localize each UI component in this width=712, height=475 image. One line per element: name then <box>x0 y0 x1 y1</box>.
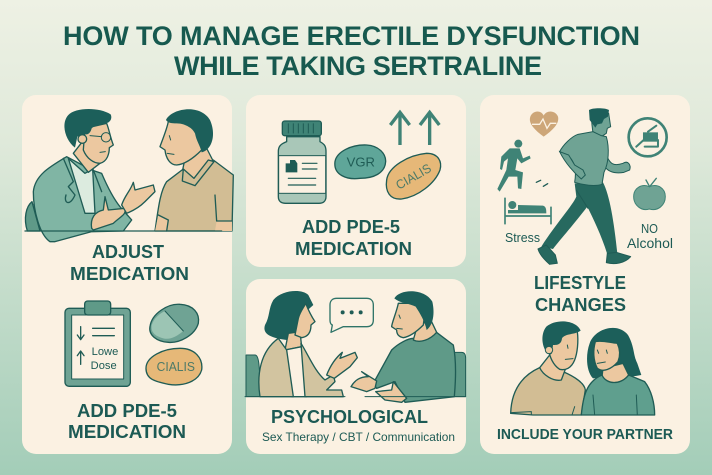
icon: no-alcohol circle <box>629 118 667 156</box>
heading: adjust medication: ADJUST <box>92 242 164 262</box>
title: WHILE TAKING SERTRALINE <box>174 51 542 81</box>
heading: adjust medication <box>70 242 189 284</box>
heading: add PDE-5 medication <box>295 217 412 259</box>
heading: lifestyle changes: LIFESTYLE <box>534 273 626 293</box>
illustration: doctor and patient <box>25 109 233 242</box>
panel: right column <box>480 95 690 454</box>
heading: adjust medication: MEDICATION <box>70 264 189 284</box>
illustration: couple <box>511 321 655 415</box>
icon: bed <box>505 198 551 224</box>
illustration: bottle, pills and arrows: CIALIS <box>394 161 434 193</box>
illustration: therapy conversation <box>245 291 466 402</box>
heading: add PDE-5 medication: ADD PDE-5 <box>302 217 400 237</box>
illustration: bottle, pills and arrows: VGR <box>347 155 375 170</box>
icon: runner <box>497 140 548 192</box>
panel: left column <box>22 95 233 454</box>
title: HOW TO MANAGE ERECTILE DYSFUNCTION <box>63 21 640 51</box>
icon: heart <box>530 112 558 137</box>
heading: lifestyle changes <box>534 273 626 315</box>
heading: include your partner: INCLUDE YOUR PARTNER <box>497 426 673 443</box>
illustration: clipboard and pills: CIALIS <box>157 360 195 374</box>
illustration: bottle, pills and arrows <box>278 112 441 203</box>
panel: psychological <box>245 279 466 454</box>
illustration: clipboard and pills: Lowe <box>92 346 118 358</box>
illustration: clipboard and pills <box>65 301 202 386</box>
figure: walking man <box>538 108 631 264</box>
text: stress: Stress <box>505 230 540 245</box>
heading: add PDE-5 medication <box>68 401 186 442</box>
heading: lifestyle changes: CHANGES <box>535 295 626 315</box>
text: no alcohol: NO <box>641 221 658 236</box>
heading: psychological: PSYCHOLOGICAL <box>271 407 428 427</box>
text: no alcohol: Alcohol <box>627 236 673 251</box>
icon: apple <box>634 178 665 210</box>
heading: add PDE-5 medication: ADD PDE-5 <box>77 401 177 421</box>
heading: add PDE-5 medication: MEDICATION <box>68 422 186 442</box>
text: no alcohol <box>627 221 673 251</box>
panel: add PDE-5 medication <box>246 95 466 267</box>
illustration: lifestyle icons and walking man <box>497 108 667 264</box>
title <box>63 21 640 81</box>
heading: add PDE-5 medication: MEDICATION <box>295 239 412 259</box>
text: therapy options: Sex Therapy / CBT / Communication <box>262 430 455 444</box>
illustration: clipboard and pills: Dose <box>91 360 117 372</box>
